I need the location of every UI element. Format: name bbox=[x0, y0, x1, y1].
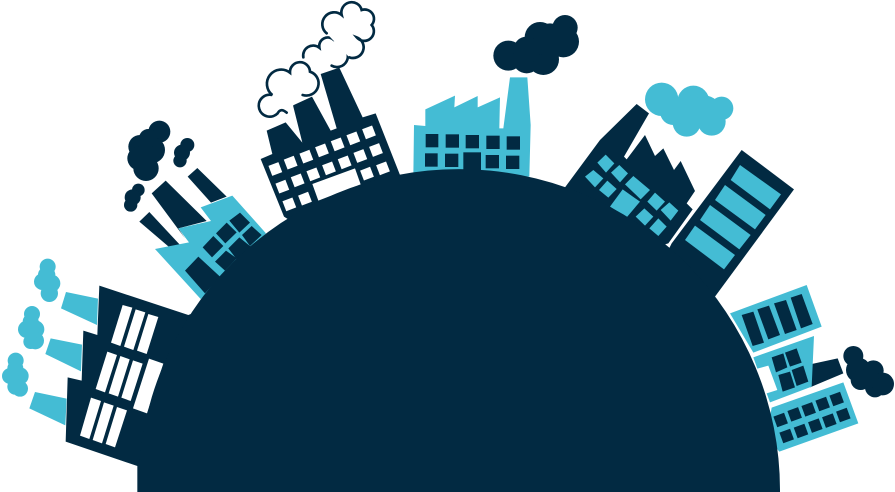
bottom building windows bbox=[773, 392, 851, 443]
cyan building bbox=[155, 196, 266, 299]
dark smoke puffs bbox=[124, 121, 194, 212]
top building windows bbox=[742, 294, 813, 346]
cyan smoke cloud bbox=[645, 83, 733, 137]
left building body bbox=[66, 286, 233, 492]
factory: cyan with dark chimneys bbox=[124, 121, 266, 299]
middle building windows bbox=[772, 348, 808, 392]
sawtooth building bbox=[413, 77, 531, 177]
tall building bbox=[660, 150, 794, 297]
planet bbox=[138, 169, 780, 492]
left building windows bbox=[80, 305, 163, 447]
cyan factory windows bbox=[585, 155, 678, 236]
factory: far left with white windows bbox=[2, 259, 233, 492]
right smoke cloud bbox=[843, 346, 894, 397]
factory: cyan sawtooth roof bbox=[413, 15, 579, 177]
white smoke clouds bbox=[259, 2, 374, 117]
dark building body bbox=[261, 68, 400, 233]
dark windows and door bbox=[425, 134, 520, 172]
white windows bbox=[268, 125, 390, 211]
factory: right side cyan buildings bbox=[730, 285, 894, 452]
dark sawtooth factory bbox=[565, 104, 695, 253]
left chimneys bbox=[29, 292, 98, 425]
dark chimneys bbox=[139, 168, 227, 248]
dark smoke cloud bbox=[493, 15, 579, 75]
left smoke puffs bbox=[2, 259, 60, 397]
middle cyan building bbox=[753, 336, 814, 402]
right chimney bbox=[810, 358, 843, 387]
top cyan building bbox=[730, 285, 822, 353]
tall building windows bbox=[685, 165, 781, 269]
factory: dark with white smoke clouds bbox=[259, 2, 400, 233]
factory: dark with cyan windows and tall building bbox=[565, 83, 794, 297]
cyan building door and windows bbox=[185, 213, 262, 293]
bottom cyan building bbox=[767, 382, 858, 452]
